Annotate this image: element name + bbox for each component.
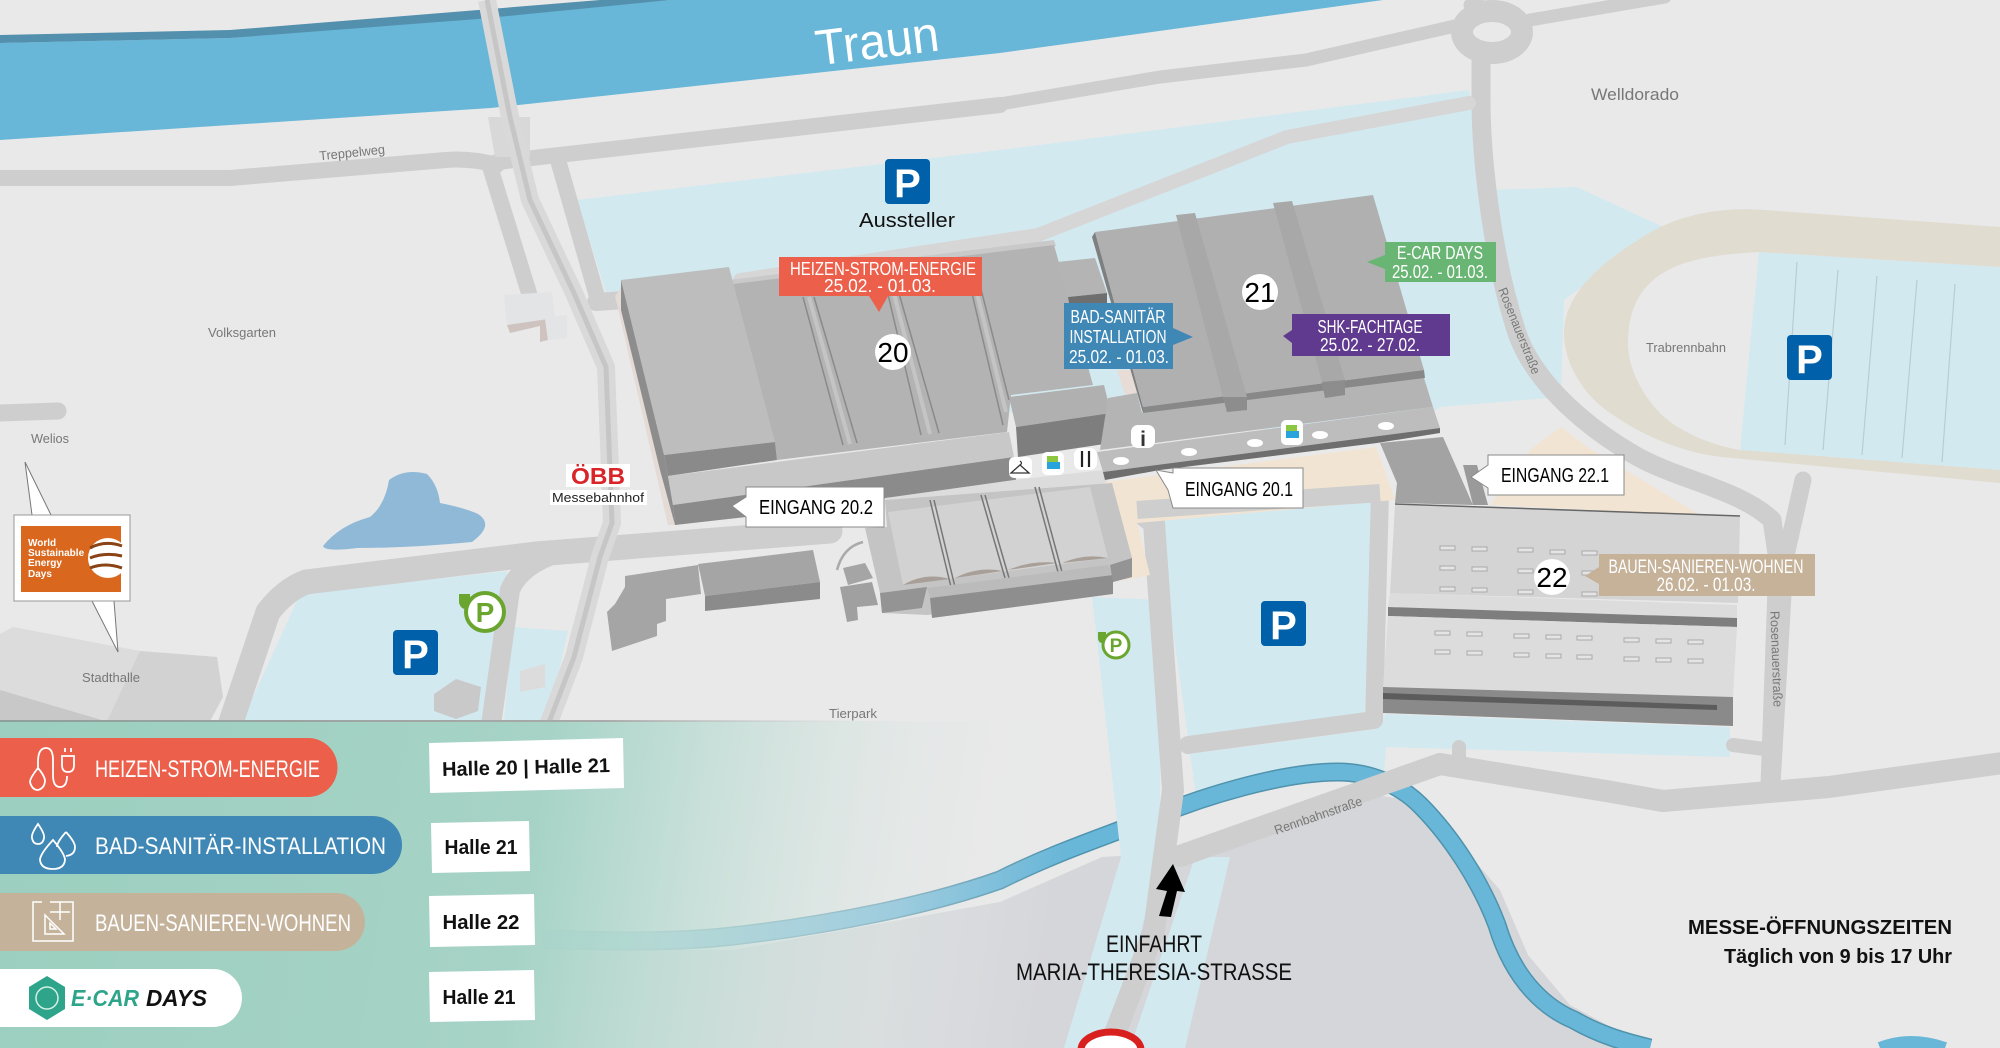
label: Heizen-Strom-Energie [779,257,982,312]
label: Bauen-Sanieren-Wohnen: 26.02. - 01.03. [1656,575,1756,596]
legend pill: Bad-Sanitär-Installation: BAD-SANITÄR-INSTALLATION [95,833,386,860]
connector [1057,258,1137,395]
label: Heizen-Strom-Energie: HEIZEN-STROM-ENERGIE [790,259,976,279]
opening hours: MESSE-ÖFFNUNGSZEITEN [1688,916,1952,939]
icon: EV charging parking small [1098,632,1129,658]
hall tag: Halle 21 [431,821,530,873]
place names: Trabrennbahn [1646,340,1726,355]
legend backdrop [0,720,1100,1048]
callout: World Sustainable Energy Days: Energy [28,558,62,569]
label: Eingang 20.2 [732,487,884,527]
legend pill: Heizen-Strom-Energie: HEIZEN-STROM-ENERGIE [95,756,320,783]
label: Bad-Sanitär-Installation: BAD-SANITÄR [1070,307,1166,327]
red sign bottom [1081,1032,1141,1048]
label: E-Car Days [1367,242,1496,282]
place names [31,85,1786,838]
tower block [1009,385,1111,457]
river Traun [0,0,1383,140]
legend pill: E-Car Days: DAYS [146,985,208,1011]
side river [542,772,1945,1048]
label: E-Car Days: E-CAR DAYS [1397,243,1483,263]
label: Bauen-Sanieren-Wohnen: BAUEN-SANIEREN-WOHNEN [1608,557,1804,578]
Stadthalle building [0,627,223,721]
hall tag: Halle 20 and 21 [429,738,624,793]
label: Bad-Sanitär-Installation [1064,303,1193,369]
road around central parking [1137,493,1380,510]
gravel area [540,790,1650,1048]
place names: Rennbahnstraße [1272,793,1364,838]
hall 20 [615,240,1115,525]
hall number 21: 21 [1244,277,1276,308]
label: Eingang 22.1: EINGANG 22.1 [1501,465,1609,487]
hall tag: Halle 21 electric: Halle 21 [442,987,516,1009]
hall number 20: 20 [877,337,909,368]
hall tag: Halle 21 electric [429,970,535,1022]
icon: information: i [1140,428,1146,451]
icon: EV charging parking small: P [1110,636,1123,657]
label: Eingang 20.2: EINGANG 20.2 [759,497,873,519]
entry label: EINFAHRT [1106,931,1202,958]
legend pill: Bad-Sanitär-Installation [0,816,402,874]
icon: brand logo [1042,452,1064,475]
parking sign: Trabrennbahn: P [1796,338,1823,382]
legend pill: Heizen-Strom-Energie [0,738,338,797]
callout: World Sustainable Energy Days: Days [28,569,52,580]
label: SHK-Fachtage: 25.02. - 27.02. [1320,335,1420,355]
place names: Rosenauerstraße [1767,611,1786,707]
hall tag: Halle 22 [429,894,535,947]
label: E-Car Days: 25.02. - 01.03. [1392,262,1488,282]
callout: World Sustainable Energy Days [14,462,130,652]
parking sign: Aussteller: Aussteller [859,210,955,232]
place names: Rosenauerstraße [1495,285,1544,376]
legend pill: E-Car Days [0,969,242,1027]
building near railway [504,292,567,342]
place names: Welios [31,431,69,446]
hall tag: Halle 20 and 21: Halle 20 | Halle 21 [442,755,610,781]
parking sign: centre [1261,601,1306,648]
OBB station sign [550,463,647,505]
parking sign: Trabrennbahn [1787,335,1832,382]
opening hours [1688,916,1952,968]
parking stripes [1785,262,1955,462]
hall tag: Halle 22: Halle 22 [442,912,520,934]
parking sign: Aussteller: P [894,162,921,206]
hall number 22: 22 [1536,562,1568,593]
parking sign: west: P [402,633,429,677]
callout: World Sustainable Energy Days: Sustainable [28,548,85,559]
pond [323,472,485,550]
L-shaped building [607,550,820,651]
label: Eingang 22.1 [1471,455,1624,495]
link block [1380,437,1488,505]
callout: World Sustainable Energy Days: World [28,538,56,549]
icon: cloakroom [1009,457,1032,478]
label: Bauen-Sanieren-Wohnen [1585,554,1815,596]
vaulted hall [837,483,1132,622]
label: Eingang 20.1: EINGANG 20.1 [1185,479,1293,501]
parking sign: Aussteller [859,159,955,232]
concourse [1097,407,1440,480]
icon: EV charging parking large [459,593,504,631]
label: SHK-Fachtage: SHK-FACHTAGE [1318,317,1422,337]
legend pill: E-Car Days: E·CAR [71,985,139,1011]
label: SHK-Fachtage [1283,314,1450,356]
label: Bad-Sanitär-Installation: INSTALLATION [1070,327,1166,347]
parking sign: centre: P [1270,604,1297,648]
icon: restaurant [1074,448,1097,470]
railway [487,0,612,725]
label: Eingang 20.1 [1156,468,1303,508]
icon: brand logo second [1281,420,1303,445]
place names: Treppelweg [318,142,386,163]
icon: EV charging parking large: P [476,597,494,628]
place names: Tierpark [829,706,878,721]
label: Bad-Sanitär-Installation: 25.02. - 01.03. [1069,347,1169,367]
hall 22 [1383,504,1740,726]
opening hours: Täglich von 9 bis 17 Uhr [1724,946,1952,968]
blue strips beside entry road [1064,597,1230,1048]
racetrack [1564,209,2000,483]
OBB station sign: ÖBB [571,463,625,489]
hall 21 [1092,195,1433,450]
entry label: MARIA-THERESIA-STRASSE [1016,959,1292,986]
hexagon and small buildings [434,664,545,719]
icon: information [1131,425,1155,451]
entrance forecourts [1105,427,1700,580]
parking sign: west [393,630,438,677]
hall tag: Halle 21: Halle 21 [444,837,518,859]
entry arrow [1156,864,1185,917]
place names: Welldorado [1591,85,1679,104]
place names: Stadthalle [82,670,140,685]
parking areas [242,90,2000,810]
legend pill: Bauen-Sanieren-Wohnen: BAUEN-SANIEREN-WOHNEN [95,910,351,937]
OBB station sign: Messebahnhof [552,490,644,505]
label: Heizen-Strom-Energie: 25.02. - 01.03. [824,276,936,296]
river label: Traun [812,6,942,76]
entry label [1016,931,1292,986]
legend pill: Bauen-Sanieren-Wohnen [0,893,365,951]
place names: Volksgarten [208,325,276,340]
